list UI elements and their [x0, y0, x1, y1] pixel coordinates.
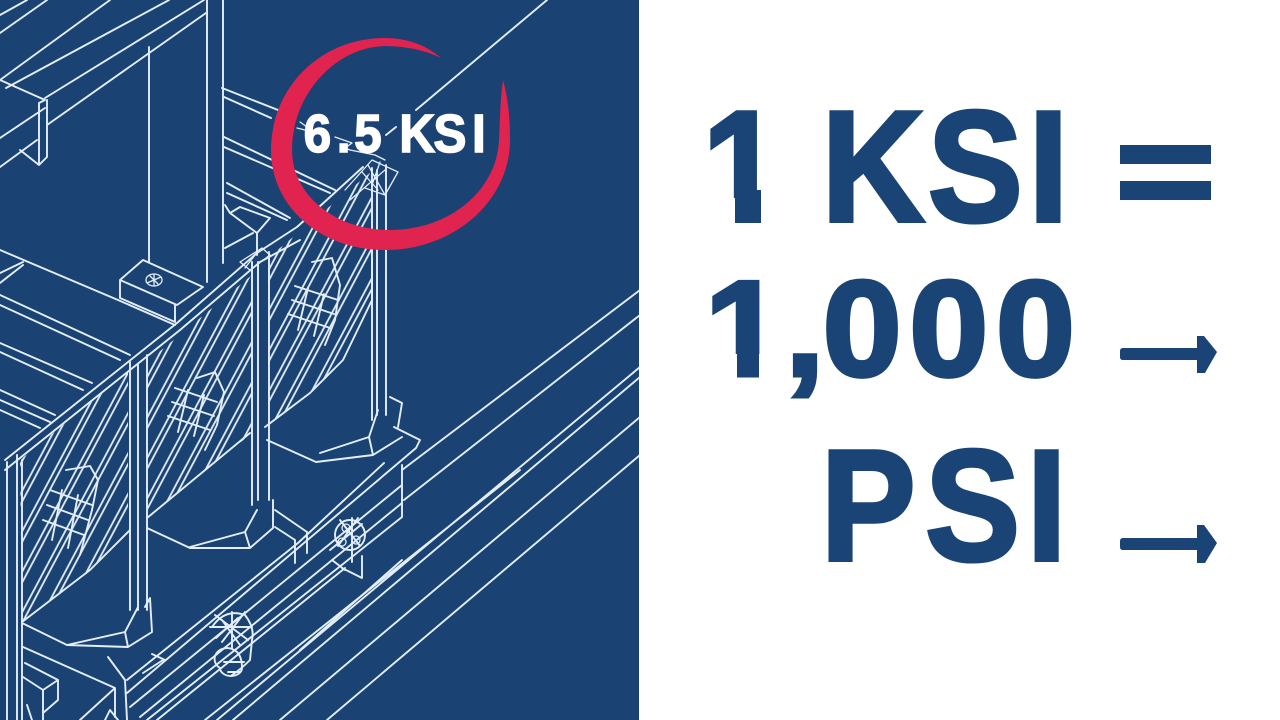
icon: equals sign: [1120, 145, 1211, 200]
long diagonals: [205, 290, 640, 720]
truss detail: [225, 205, 270, 255]
heading line: 1 KSI: 1 KSI: [0, 78, 1068, 255]
hatched panels: [5, 167, 372, 622]
arrow 1: [1120, 336, 1217, 373]
squiggle behind callout: [297, 122, 385, 160]
connector nodes: [210, 518, 365, 676]
arrow 2: [1120, 525, 1217, 563]
callout: 6.5 KSI ring: [0, 38, 510, 250]
panel: blueprint background: [0, 0, 639, 720]
rear rails: [222, 0, 547, 220]
blueprint line drawing: [0, 0, 640, 720]
callout value: 6.5 KSI: [0, 103, 486, 163]
upper beam: [0, 0, 206, 167]
heading line: 1,000: 1,000: [705, 253, 1075, 405]
bracket block: [120, 260, 203, 322]
vertical column: [149, 0, 223, 282]
red ring: [271, 38, 510, 250]
post feet: [22, 397, 402, 647]
panel window details: [43, 160, 398, 555]
support posts: [7, 165, 386, 720]
lower left block: [23, 647, 165, 720]
heading line: PSI: PSI: [821, 417, 1066, 594]
lower left beams: [0, 250, 175, 428]
base beam: [127, 427, 420, 720]
